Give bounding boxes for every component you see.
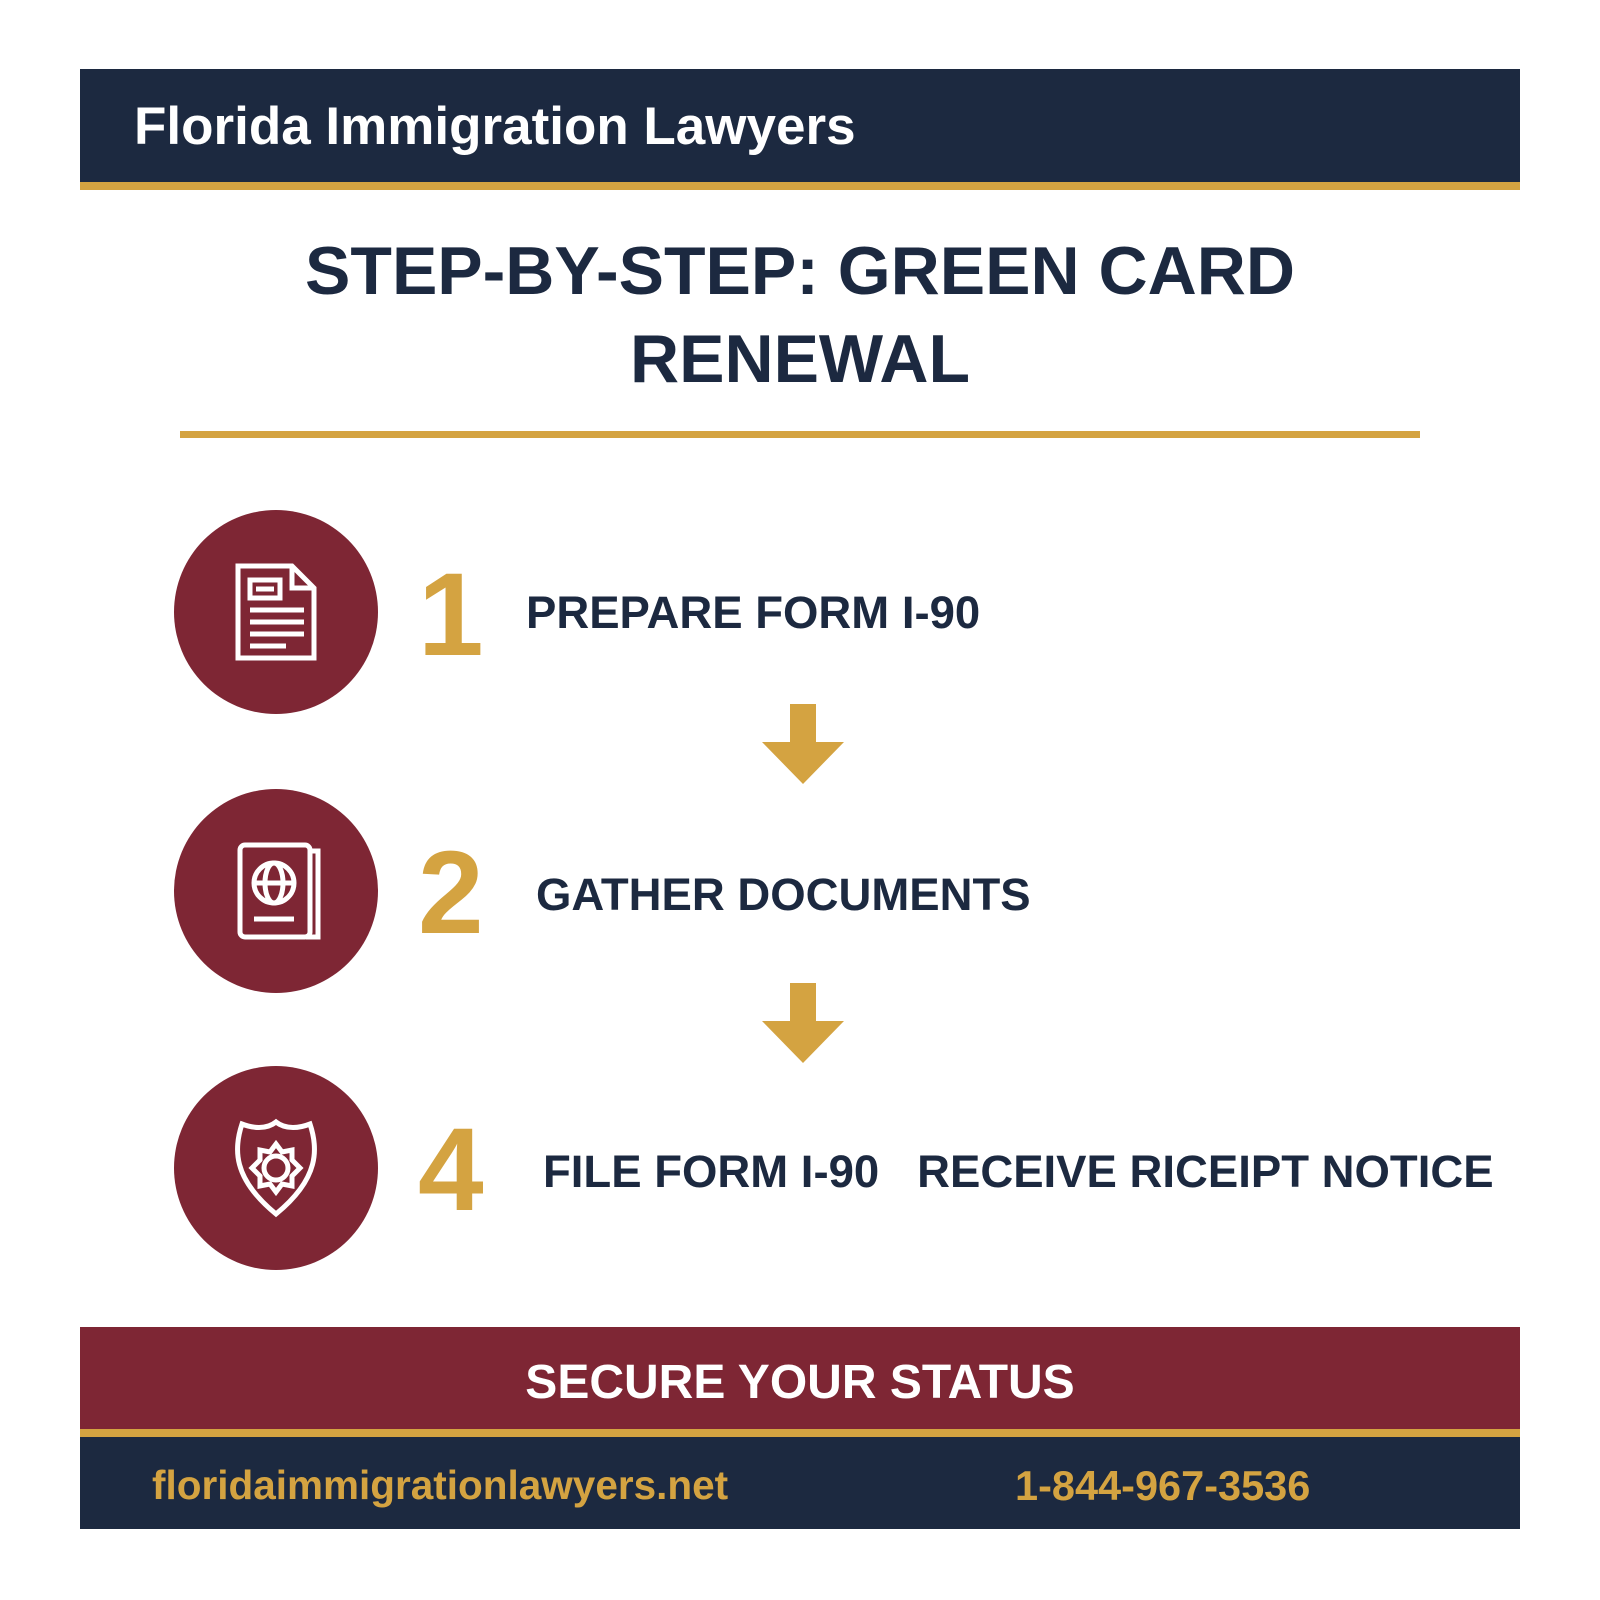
step 2 icon: passport	[174, 789, 378, 993]
footer bar	[80, 1437, 1520, 1529]
step 3 icon: badge	[174, 1066, 378, 1270]
step 1 label: PREPARE FORM I-90	[526, 587, 980, 638]
step 3 number: 4	[418, 1104, 484, 1236]
call-to-action banner	[80, 1327, 1520, 1429]
step 1 icon: document	[174, 510, 378, 714]
arrow 2	[762, 983, 844, 1063]
title: STEP-BY-STEP: GREEN CARD	[305, 233, 1295, 309]
arrow 1	[762, 704, 844, 784]
phone: 1-844-967-3536	[1015, 1462, 1310, 1509]
header bar	[80, 69, 1520, 182]
step 2 label: GATHER DOCUMENTS	[536, 869, 1031, 920]
title	[305, 233, 1295, 397]
step 2 number: 2	[418, 827, 484, 959]
banner text: SECURE YOUR STATUS	[525, 1356, 1075, 1409]
header text: Florida Immigration Lawyers	[134, 97, 856, 156]
step 1 number: 1	[418, 549, 484, 681]
title: RENEWAL	[630, 321, 970, 397]
step 3 label: FILE FORM I-90 RECEIVE RICEIPT NOTICE	[543, 1146, 1494, 1197]
website: floridaimmigrationlawyers.net	[152, 1462, 728, 1508]
